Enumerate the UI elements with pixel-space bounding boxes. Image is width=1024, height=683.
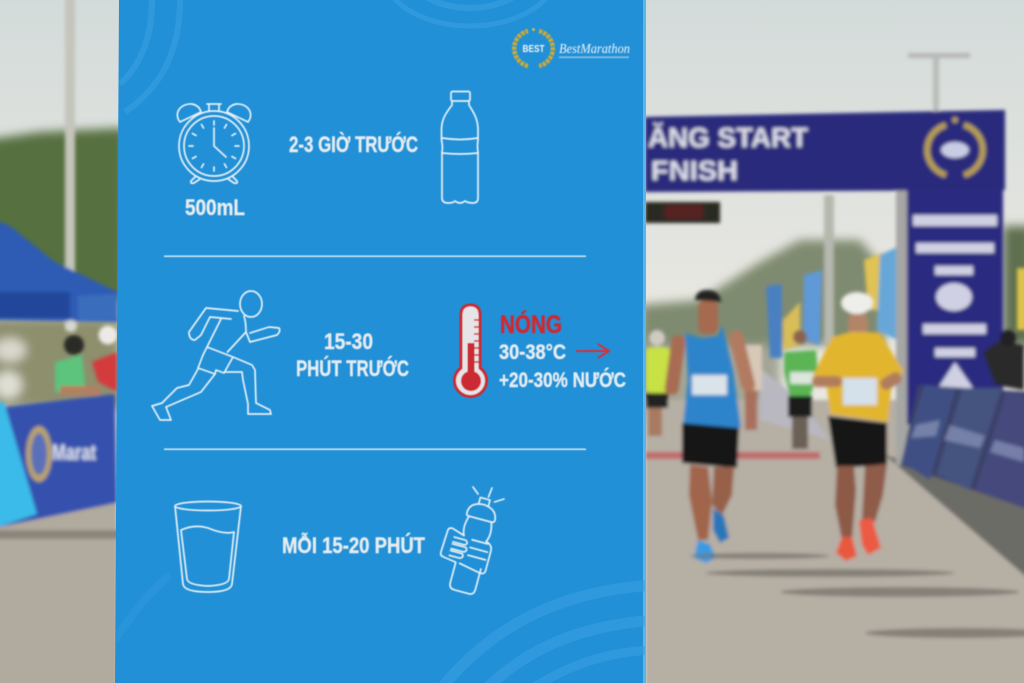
text: extra water: +20-30% NƯỚC xyxy=(499,368,626,392)
icon: laurel wreath badge: BEST xyxy=(522,44,544,55)
runner silhouettes, far xyxy=(649,330,665,346)
background photo: finish arch and runners xyxy=(640,0,1024,683)
text: every 15-20 minutes: MỖI 15-20 PHÚT xyxy=(282,532,425,558)
icon: alarm clock xyxy=(177,104,251,183)
ground shadows xyxy=(690,553,1024,638)
text: hot: NÓNG xyxy=(500,309,562,339)
divider lines xyxy=(164,256,586,450)
icon: glass of water xyxy=(175,502,241,592)
row 3: every fifteen to twenty minutes xyxy=(175,487,504,596)
background photo: left side with tent and spectators xyxy=(0,0,130,683)
icon: squeeze sparks xyxy=(473,487,504,502)
icon: running figure xyxy=(152,291,280,420)
icon: thermometer xyxy=(454,305,486,396)
background photo: finish arch and runners: FNISH xyxy=(651,155,738,186)
logo: BestMarathon xyxy=(514,28,630,66)
background photo: finish arch and runners: ĂNG START xyxy=(648,122,808,153)
icon: hand squeezing bottle xyxy=(432,491,504,596)
runner yellow xyxy=(848,312,868,336)
text: 500mL: 500mL xyxy=(185,195,245,220)
text: 15-30: 15-30 xyxy=(324,329,373,354)
background photo: left side with tent and spectators: Marat xyxy=(52,440,97,465)
text: minutes before: PHÚT TRƯỚC xyxy=(296,356,409,381)
runner blue xyxy=(664,334,686,396)
text: temperature: 30-38°C xyxy=(499,341,566,364)
row 1: two to three hours before xyxy=(177,92,478,220)
text: 2-3 hours before: 2-3 GIỜ TRƯỚC xyxy=(289,132,418,157)
icon: water bottle xyxy=(442,92,478,203)
row 2: fifteen to thirty minutes before xyxy=(152,291,626,420)
panel: blue hydration sign xyxy=(115,0,660,683)
logo wordmark: BestMarathon xyxy=(559,41,630,56)
arrow: red xyxy=(576,344,609,358)
decorative swirl arcs xyxy=(115,0,660,683)
